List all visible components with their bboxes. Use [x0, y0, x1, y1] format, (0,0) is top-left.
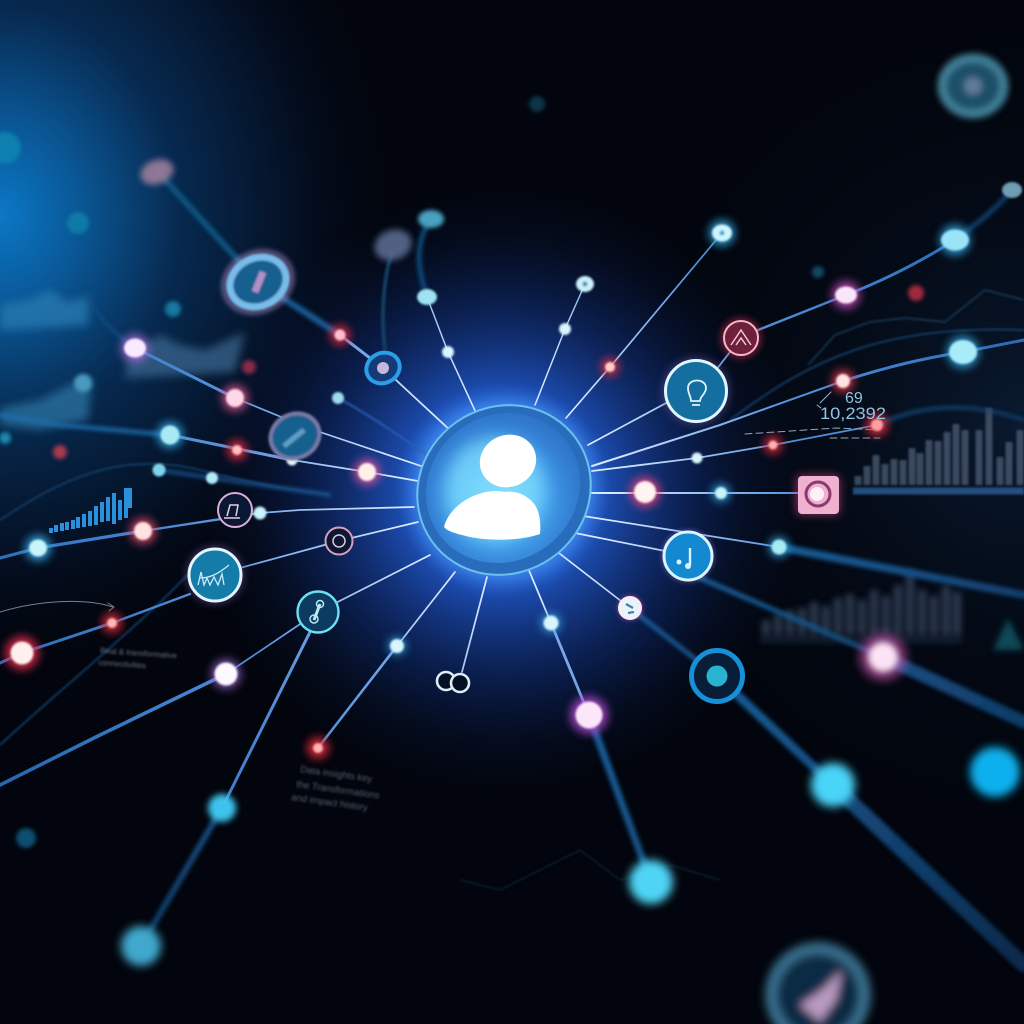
blue bar chart, left [51, 488, 130, 533]
icon ring: light bulb [663, 358, 729, 424]
central user hub [378, 365, 630, 615]
icon ring: pink mountain [720, 317, 762, 359]
annotation tick marks [817, 392, 831, 408]
icon: linked rings [437, 672, 469, 692]
small caption, lower [291, 764, 380, 814]
data labels: 69 [845, 390, 863, 407]
icon ring: coin [326, 528, 352, 554]
icon ring: chart and plane [187, 547, 243, 603]
data labels: 10,2392 [820, 405, 886, 423]
small caption, left: connectivities [98, 658, 146, 670]
mid segments, thicker with depth [0, 240, 1024, 808]
icon ring: laptop [218, 493, 252, 527]
small caption, left [98, 646, 178, 670]
central hub glow field [203, 190, 803, 790]
icon: pink rounded square [796, 475, 840, 515]
near spokes, bright white-blue [226, 233, 877, 674]
small caption, lower: and impact history [291, 792, 369, 814]
connector lines [0, 172, 1024, 965]
node glows: cyan [25, 220, 979, 655]
small caption, left: Real & transformative [100, 646, 178, 660]
icon ring: small blue [361, 347, 405, 389]
node glows: pink and red [5, 281, 888, 759]
person icon [444, 426, 544, 540]
bar chart: upper right, blurred [853, 408, 1024, 491]
icon ring: tool [298, 592, 338, 632]
icon ring: target [692, 650, 742, 702]
faded background line chart, right [460, 290, 1024, 890]
icon ring: bottom, blurred [771, 948, 865, 1024]
icon ring: music [661, 529, 715, 583]
annotation arrow [0, 601, 114, 612]
icon ring: blurred pink-blue [263, 405, 327, 467]
network nodes, soft focus [10, 224, 977, 753]
near-field segments, blurred and dim [0, 172, 1024, 965]
icon ring: small pink node [617, 595, 643, 621]
hub inner glow [445, 438, 545, 542]
bar chart: lower right, blurred [760, 570, 962, 640]
small caption, lower: Data insights key [300, 764, 373, 785]
icon ring: analytics, upper left [214, 241, 302, 323]
dashed annotation lines [745, 428, 880, 438]
faded background arcs [0, 250, 1024, 745]
data labels [820, 390, 886, 423]
small caption, lower: the Transformations [296, 779, 380, 802]
icon ring: top right, blurred [942, 58, 1004, 114]
faded background area charts, left [0, 290, 245, 430]
